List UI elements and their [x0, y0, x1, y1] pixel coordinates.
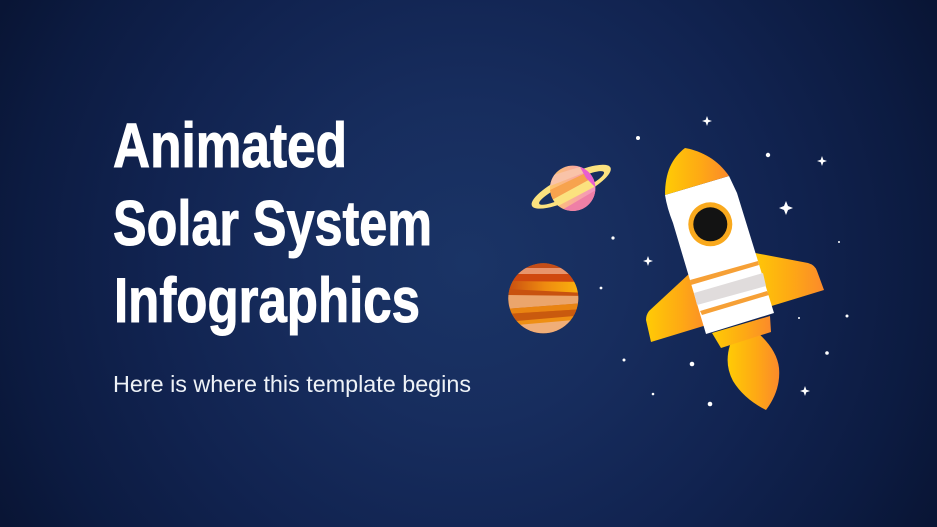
title	[113, 111, 432, 336]
rocket flame	[728, 333, 779, 410]
icon: ringed planet	[532, 164, 611, 211]
rocket body	[665, 176, 774, 334]
rocket stripes	[690, 261, 769, 315]
icon: rocket	[646, 148, 824, 410]
title: Animated	[113, 111, 347, 181]
rocket nose	[665, 148, 729, 195]
icon: striped planet	[508, 263, 578, 334]
rocket nozzle	[712, 316, 771, 348]
stars	[600, 116, 848, 406]
subtitle: Here is where this template begins	[113, 371, 471, 397]
title: Infographics	[114, 266, 420, 336]
rocket left fin	[646, 273, 710, 342]
title: Solar System	[113, 189, 432, 259]
rocket right fin	[750, 252, 824, 308]
rocket window	[688, 202, 732, 246]
